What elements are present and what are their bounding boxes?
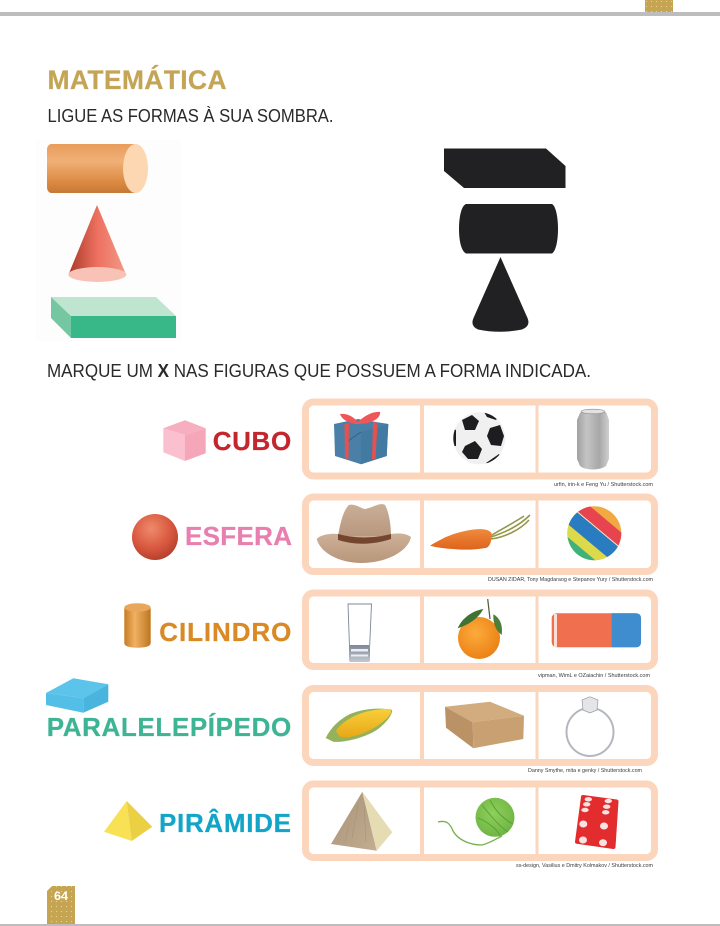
red cone [68, 205, 126, 282]
striped ball [567, 506, 622, 560]
eraser [552, 613, 641, 647]
label: cilindro: CILINDRO [159, 617, 291, 647]
top gold tab [645, 0, 673, 12]
cardboard box [445, 702, 524, 748]
icon: red sphere [132, 514, 178, 560]
panel: piramide options [306, 784, 654, 858]
orange cylinder [47, 144, 148, 193]
red die [577, 797, 616, 847]
cone shadow [472, 257, 528, 332]
panel: paralelepipedo options [306, 688, 654, 762]
label: cubo: CUBO [213, 426, 291, 456]
row: cubo [163, 402, 655, 488]
wooden pyramid [331, 792, 392, 851]
cylinder shadow [459, 204, 558, 254]
icon: orange cylinder [124, 603, 151, 648]
ball of yarn [438, 798, 514, 845]
soccer ball [452, 412, 505, 466]
icon: pink cube [163, 420, 206, 461]
row: esfera [132, 491, 654, 583]
orange fruit [458, 599, 502, 659]
coloured solids column [36, 140, 181, 342]
box shadow [444, 148, 566, 188]
icon: yellow pyramid [104, 801, 152, 841]
panel: cilindro options [306, 593, 654, 666]
page number tab [47, 886, 75, 924]
soda can [577, 409, 609, 470]
photo credit: DUSAN ZIDAR, Tony Magdaraog e Stepanov Yury / Shutterstock.com [488, 577, 653, 583]
top gray rule [0, 12, 720, 16]
instruction: match shapes to shadows: LIGUE AS FORMAS À SUA SOMBRA. [48, 105, 334, 126]
black shadows column [444, 148, 566, 332]
panel: cubo options [306, 402, 654, 476]
row: piramide [104, 784, 654, 869]
instruction: mark an X: MARQUE UM X NAS FIGURAS QUE POSSUEM A FORMA INDICADA. [47, 360, 591, 381]
drinking glass [348, 604, 372, 661]
carrot [430, 515, 530, 550]
icon: blue box [46, 678, 108, 713]
title: MATEMÁTICA [48, 65, 226, 95]
page number tab: 64 [54, 889, 68, 903]
row: cilindro [124, 593, 655, 679]
bottom gray rule [0, 924, 720, 926]
diamond ring [566, 697, 614, 756]
row: paralelepipedo [46, 678, 654, 774]
photo credit: urfin, irin-k e Feng Yu / Shutterstock.com [554, 482, 653, 488]
label: piramide: PIRÂMIDE [159, 808, 291, 838]
photo credit: ss-design, Vasilius e Dmitry Kolmakov / Shutterstock.com [516, 863, 653, 869]
label: paralelepipedo: PARALELEPÍPEDO [47, 712, 291, 742]
hat [317, 504, 411, 563]
panel: esfera options [306, 491, 654, 575]
photo credit: vipman, WimL e OZaiachin / Shutterstock.com [538, 673, 650, 679]
photo credit: Danny Smythe, mita e genky / Shutterstock.com [528, 768, 642, 774]
gift box [334, 412, 388, 464]
green box [51, 297, 176, 338]
corn cob [326, 709, 392, 742]
label: esfera: ESFERA [185, 521, 292, 551]
